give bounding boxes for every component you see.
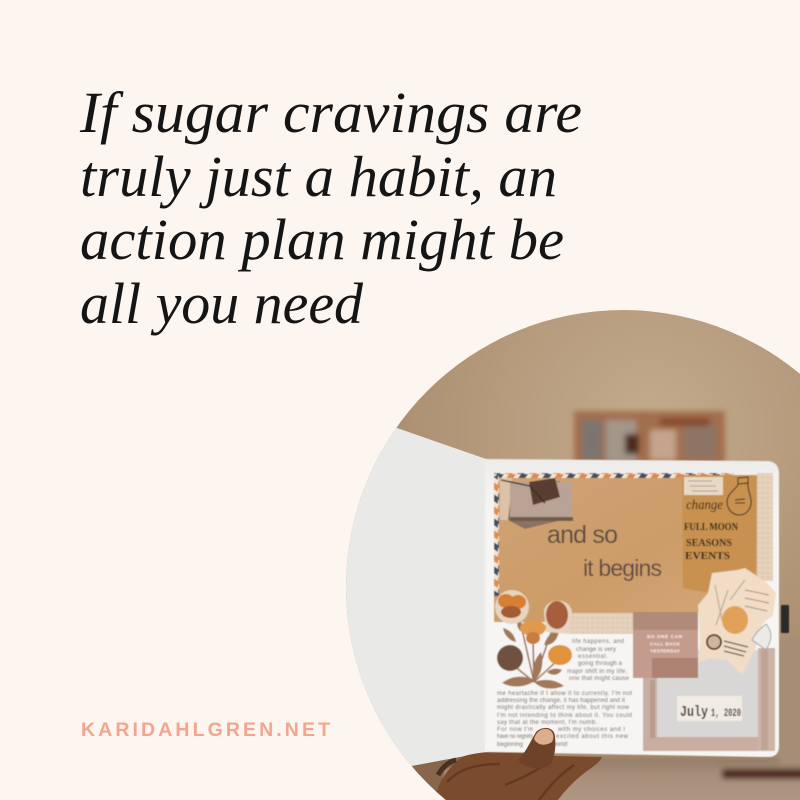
photo stack: [500, 478, 573, 529]
handwritten journal text: life happens, and: [572, 639, 624, 645]
thumb: [518, 728, 555, 768]
title: truly just a habit, an: [80, 144, 557, 209]
shadow gap beneath left page: [412, 752, 485, 794]
handwritten journal text: I'm not intending to think about it. You could: [497, 713, 632, 719]
tag text: SEASONS: [686, 537, 732, 549]
handwritten journal text: going through a: [578, 661, 623, 667]
handwritten journal text: major shift in my life,: [567, 669, 627, 675]
pink quote card: [633, 612, 698, 678]
handwritten: and so it begins: it begins: [583, 555, 662, 581]
handwritten journal text: For now I'm: [497, 727, 533, 733]
title: If sugar cravings are: [79, 80, 582, 145]
tag text: [684, 498, 738, 562]
pansy 1: [495, 590, 529, 624]
washi tape grid right: [757, 473, 773, 581]
lightbulb icon: [727, 477, 751, 515]
pansy 2: [544, 601, 572, 634]
handwritten journal text: world!: [551, 742, 568, 748]
tag text: EVENTS: [685, 550, 730, 562]
pink quote card: YESTERDAY: [650, 648, 680, 654]
date label: July: [680, 704, 708, 721]
pansy 4: [497, 645, 523, 671]
website footer: KARIDAHLGREN.NET: [81, 719, 330, 741]
blurred wall picture: [574, 411, 725, 466]
handwritten journal text: me heartache if I allow it to currently. I'm not: [497, 691, 632, 697]
pressed pansy flowers: [495, 590, 572, 689]
pressed flower collage: [698, 568, 776, 675]
date label: [677, 696, 742, 721]
hand: [434, 751, 602, 800]
notebook left page: [340, 420, 487, 766]
handwritten journal text: [497, 639, 632, 748]
handwritten journal text: have no regrets: [497, 734, 533, 740]
handwritten: and so it begins: and so: [547, 521, 618, 549]
date label: 1, 2020: [711, 708, 741, 720]
washi tape grid centre: [570, 612, 634, 634]
tag text: change: [686, 498, 723, 513]
pansy 5: [548, 645, 572, 665]
blurred floor: [432, 756, 800, 800]
airmail stripe left: [494, 476, 499, 596]
kraft envelope: [494, 473, 757, 622]
title: [79, 80, 582, 336]
handwritten journal text: excited about this new: [556, 734, 629, 740]
handwritten: and so it begins: [547, 521, 662, 581]
handwritten journal text: essential.: [578, 654, 608, 660]
tag note: [684, 477, 723, 495]
blurred room wall: [340, 305, 800, 800]
circular photo: [340, 305, 800, 800]
tag lines: [688, 481, 718, 491]
tag text: FULL MOON: [684, 521, 738, 533]
grey frame with tape: [643, 648, 775, 751]
title: all you need: [80, 271, 364, 336]
handwritten journal text: might drastically affect my life, but right now: [497, 705, 630, 711]
handwritten journal text: one that might cause: [569, 676, 630, 682]
pansy 3: [520, 620, 546, 644]
pink quote card: CALL BACK: [650, 642, 681, 646]
handwritten journal text: with my choices and I: [557, 727, 625, 733]
title: action plan might be: [80, 207, 564, 272]
notebook right page: [485, 459, 779, 757]
handwritten journal text: addressing the change, it has happened and it: [497, 698, 625, 704]
handwritten journal text: change is very: [576, 647, 616, 653]
airmail stripe top: [494, 473, 734, 478]
kraft tag: [682, 475, 757, 592]
pink quote card: NO ONE CAN: [647, 634, 683, 639]
handwritten journal text: beginning: [497, 742, 523, 748]
handwritten journal text: say that at the moment, I'm numb.: [497, 720, 597, 726]
notebook contents: [485, 459, 789, 757]
black page tab: [781, 605, 789, 633]
